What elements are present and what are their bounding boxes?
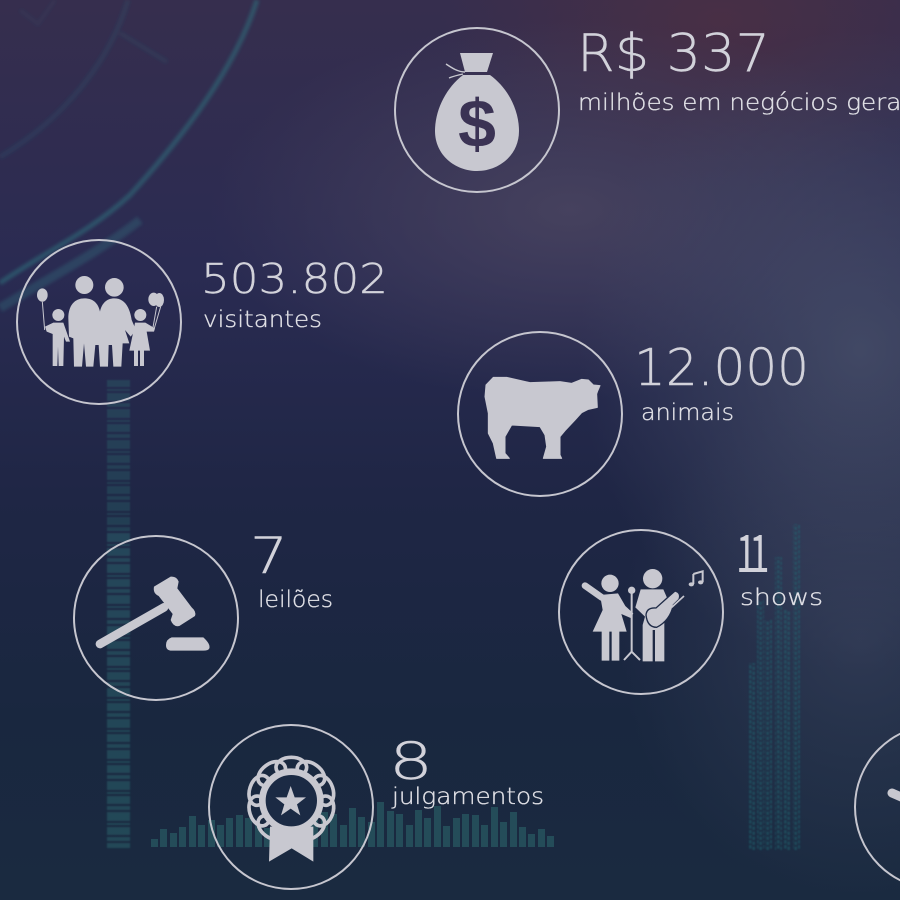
- caption: julgamentos: [391, 784, 544, 810]
- caption: shows: [740, 585, 823, 611]
- money bag badge: $: [458, 86, 496, 162]
- value: 7: [250, 527, 288, 585]
- caption: visitantes: [203, 307, 322, 333]
- caption: animais: [641, 400, 734, 426]
- stat: judging: [209, 725, 544, 889]
- caption: leilões: [258, 587, 333, 613]
- decorative arcs: [0, 0, 257, 308]
- partial badge at right edge: [855, 725, 900, 889]
- left vertical barcode: [107, 380, 130, 848]
- right vertical dotted bars: [748, 524, 800, 850]
- rosette badge: [209, 725, 373, 889]
- stat: business value: [395, 24, 900, 192]
- value: 503.802: [201, 255, 388, 303]
- stat: shows: [559, 512, 823, 694]
- value: 12.000: [634, 339, 809, 398]
- family badge: [17, 240, 181, 404]
- stat: animals: [458, 332, 809, 496]
- stat: auctions: [74, 527, 333, 700]
- value: 11: [736, 512, 767, 587]
- cow badge: [458, 332, 622, 496]
- stat: visitors: [17, 240, 388, 404]
- gavel badge: [74, 536, 238, 700]
- bottom equalizer bars: [151, 802, 554, 847]
- value: 8: [389, 733, 433, 792]
- money bag badge: [395, 28, 559, 192]
- performers badge: [559, 530, 723, 694]
- value: R$ 337: [577, 24, 770, 84]
